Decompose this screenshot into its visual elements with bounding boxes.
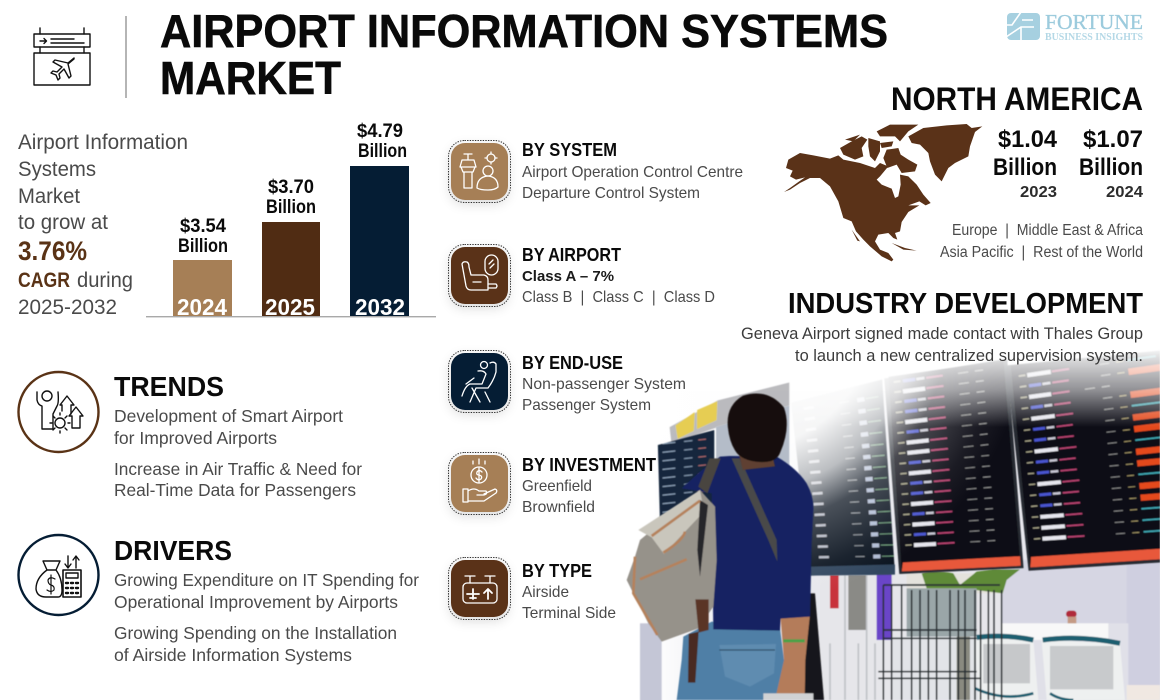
bar: 2024: $3.54: [180, 216, 226, 237]
drivers text: [114, 570, 419, 665]
list: end uses: Non-passenger System: [522, 376, 686, 393]
bar: 2032: 2032: [355, 294, 405, 320]
market growth summary text: to grow at: [18, 210, 108, 234]
list: systems: Departure Control System: [522, 185, 700, 202]
bar: 2024: [173, 216, 232, 320]
trends text: Real-Time Data for Passengers: [114, 480, 356, 500]
list: investments: Greenfield: [522, 478, 592, 495]
segment: by investment: [448, 452, 656, 516]
bar: 2032: $4.79: [357, 121, 403, 142]
bar: 2025: $3.70: [268, 177, 314, 198]
value: 2024: [1079, 126, 1143, 201]
logo: Fortune Business Insights: FORTUNE: [1045, 10, 1143, 34]
bar: 2032: Billion: [358, 141, 407, 162]
icon: hand holding coin: [448, 452, 510, 516]
value: 2024: $1.07: [1083, 126, 1143, 153]
segment: by type: [448, 558, 616, 622]
segment: by system: [448, 140, 743, 204]
list: end uses: Passenger System: [522, 397, 651, 414]
list: types: Airside: [522, 584, 569, 601]
list: investments: [522, 478, 595, 516]
header icon: airport sign with plane: [34, 28, 90, 85]
trends text: [114, 406, 362, 500]
bar: 2025: 2025: [265, 294, 315, 320]
title: MARKET: [160, 52, 341, 104]
trends text: Increase in Air Traffic & Need for: [114, 459, 362, 479]
heading: trends: TRENDS: [114, 371, 224, 402]
segment: by end-use: [448, 350, 686, 414]
market growth summary text: [18, 130, 188, 319]
market growth summary text: Market: [18, 184, 80, 208]
value: 2023: $1.04: [998, 126, 1058, 153]
trends text: Development of Smart Airport: [114, 406, 343, 426]
map: north america: [784, 124, 982, 261]
industry development text: Geneva Airport signed made contact with Thales Group: [741, 324, 1143, 343]
logo: Fortune Business Insights: BUSINESS INSIGHTS: [1045, 32, 1143, 43]
panel: drivers: [18, 535, 419, 665]
heading: industry development: INDUSTRY DEVELOPMENT: [788, 288, 1143, 320]
panel: industry development: [741, 288, 1143, 365]
icon: money bag and calculator: [18, 535, 98, 615]
market growth summary text: during: [77, 268, 133, 292]
market growth summary text: Systems: [18, 157, 96, 181]
value: 2023: 2023: [1020, 184, 1057, 201]
industry development text: [741, 324, 1143, 365]
segment: by airport: [448, 244, 715, 308]
market growth summary text: Airport Information: [18, 130, 188, 154]
heading: by end-use: BY END-USE: [522, 353, 623, 373]
panel: north america: [784, 81, 1143, 261]
trends text: for Improved Airports: [114, 428, 277, 448]
bar: 2032: [350, 121, 409, 320]
list: end uses: [522, 376, 686, 414]
panel: trends: [18, 371, 362, 500]
list: airport classes: Class A – 7%: [522, 268, 614, 285]
list: airport classes: Class B | Class C | Class D: [522, 289, 715, 306]
value: 2024: 2024: [1106, 184, 1143, 201]
bar: 2025: Billion: [266, 197, 316, 218]
list: airport classes: [522, 268, 715, 306]
bar: 2024: Billion: [178, 236, 228, 257]
heading: by airport: BY AIRPORT: [522, 245, 621, 265]
bar: 2025: [262, 177, 320, 320]
other regions: [940, 222, 1143, 261]
market growth summary text: 3.76%: [18, 236, 87, 266]
icon: person, gear and arrows: [18, 372, 98, 452]
list: investments: Brownfield: [522, 499, 595, 516]
heading: drivers: DRIVERS: [114, 535, 232, 566]
drivers text: of Airside Information Systems: [114, 645, 352, 665]
drivers text: Growing Expenditure on IT Spending for: [114, 570, 419, 590]
drivers text: Growing Spending on the Installation: [114, 623, 397, 643]
list: types: [522, 584, 616, 622]
icon: hanging airport sign: [448, 558, 510, 621]
drivers text: Operational Improvement by Airports: [114, 592, 398, 612]
bar: 2024: 2024: [177, 294, 227, 320]
list: systems: Airport Operation Control Centre: [522, 164, 743, 181]
value: 2023: Billion: [993, 154, 1057, 181]
value: 2023: [993, 126, 1058, 201]
photo: traveller looking at airport departure boards: [626, 350, 1160, 700]
market growth summary text: 2025-2032: [18, 295, 117, 319]
list: types: Terminal Side: [522, 605, 616, 622]
logo: Fortune Business Insights: [1006, 10, 1143, 43]
title: [160, 5, 888, 104]
header divider: [125, 16, 127, 98]
heading: by investment: BY INVESTMENT: [522, 455, 656, 475]
bar chart: [146, 121, 436, 320]
list: systems: [522, 164, 743, 202]
icon: seated passenger: [448, 350, 510, 414]
market growth summary text: CAGR: [18, 269, 70, 292]
icon: control tower and operator: [448, 140, 510, 204]
title: AIRPORT INFORMATION SYSTEMS: [160, 5, 888, 57]
icon: aircraft seat and window: [448, 244, 510, 308]
industry development text: to launch a new centralized supervision system.: [795, 346, 1143, 365]
heading: by type: BY TYPE: [522, 561, 592, 581]
value: 2024: Billion: [1079, 154, 1143, 181]
heading: by system: BY SYSTEM: [522, 140, 617, 160]
heading: north america: NORTH AMERICA: [891, 81, 1143, 117]
other regions: Europe | Middle East & Africa: [952, 222, 1143, 239]
other regions: Asia Pacific | Rest of the World: [940, 244, 1143, 261]
